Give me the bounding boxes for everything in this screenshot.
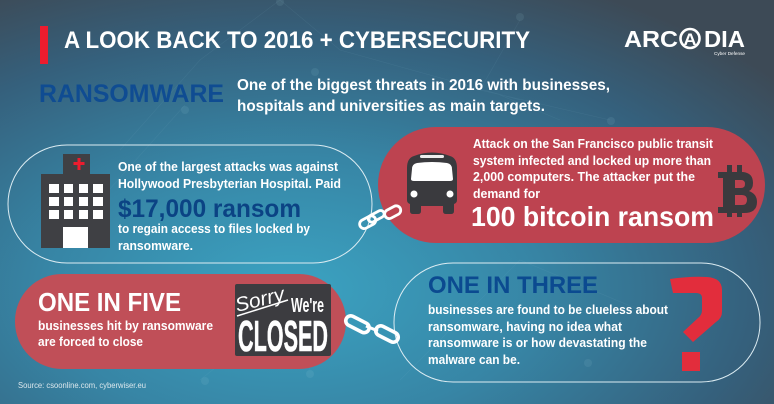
logo: Arcadia: A	[684, 30, 696, 49]
bus attack text: demand for	[473, 187, 540, 201]
one in three text: businesses are found to be clueless about	[428, 303, 669, 317]
bus attack text: system infected and locked up more than	[473, 154, 711, 168]
ransomware description: hospitals and universities as main targets.	[237, 98, 545, 115]
one in three text: ransomware, having no idea what	[428, 320, 623, 334]
ransom amount: $17,000 ransom	[118, 195, 301, 223]
logo: Arcadia: Cyber Defense	[714, 51, 746, 56]
one in three text: ransomware is or how devastating the	[428, 336, 647, 350]
hospital attack text: ransomware.	[118, 239, 193, 253]
one in five text: are forced to close	[38, 334, 143, 349]
icon: closed sign: CLOSED	[238, 312, 328, 361]
icon: closed sign	[233, 283, 331, 361]
panel: one in five	[15, 274, 346, 369]
one in three heading: ONE IN THREE	[428, 272, 598, 299]
logo: Arcadia	[624, 26, 746, 56]
one in five heading: ONE IN FIVE	[38, 287, 181, 317]
ransomware description: One of the biggest threats in 2016 with businesses,	[237, 77, 610, 94]
bus attack text: Attack on the San Francisco public transit	[473, 137, 714, 151]
one in five text: businesses hit by ransomware	[38, 318, 213, 333]
heading: ransomware: RANSOMWARE	[39, 80, 224, 108]
icon: bus	[407, 152, 457, 214]
icon: chain link bottom	[344, 314, 400, 344]
icon: chain link top	[358, 204, 402, 230]
icon: question mark	[670, 277, 722, 371]
panel: hospital attack	[8, 145, 372, 263]
title accent bar	[40, 26, 48, 64]
icon: closed sign: Sorry	[233, 283, 288, 317]
one in three text: malware can be.	[428, 353, 520, 367]
icon: hospital	[41, 154, 110, 248]
hospital attack text: Hollywood Presbyterian Hospital. Paid	[118, 177, 341, 191]
panel: bus attack	[378, 127, 765, 243]
icon: bitcoin	[718, 165, 757, 217]
hospital attack text	[118, 160, 341, 253]
bitcoin ransom amount: 100 bitcoin ransom	[471, 201, 714, 232]
title: A LOOK BACK TO 2016 + CYBERSECURITY	[64, 27, 530, 54]
icon: closed sign: We're	[291, 295, 324, 317]
one in three text	[428, 303, 669, 367]
panel: one in three	[394, 263, 760, 382]
logo: Arcadia: DIA	[704, 26, 745, 52]
hospital attack text: One of the largest attacks was against	[118, 160, 339, 174]
source: Source: csoonline.com, cyberwiser.eu	[18, 381, 146, 390]
bus attack text: 2,000 computers. The attacker put the	[473, 170, 695, 184]
hospital attack text: to regain access to files locked by	[118, 222, 310, 236]
bus attack text	[473, 137, 714, 201]
logo: Arcadia: ARC	[624, 26, 678, 52]
one in five text	[38, 318, 213, 349]
ransomware description	[237, 77, 610, 115]
